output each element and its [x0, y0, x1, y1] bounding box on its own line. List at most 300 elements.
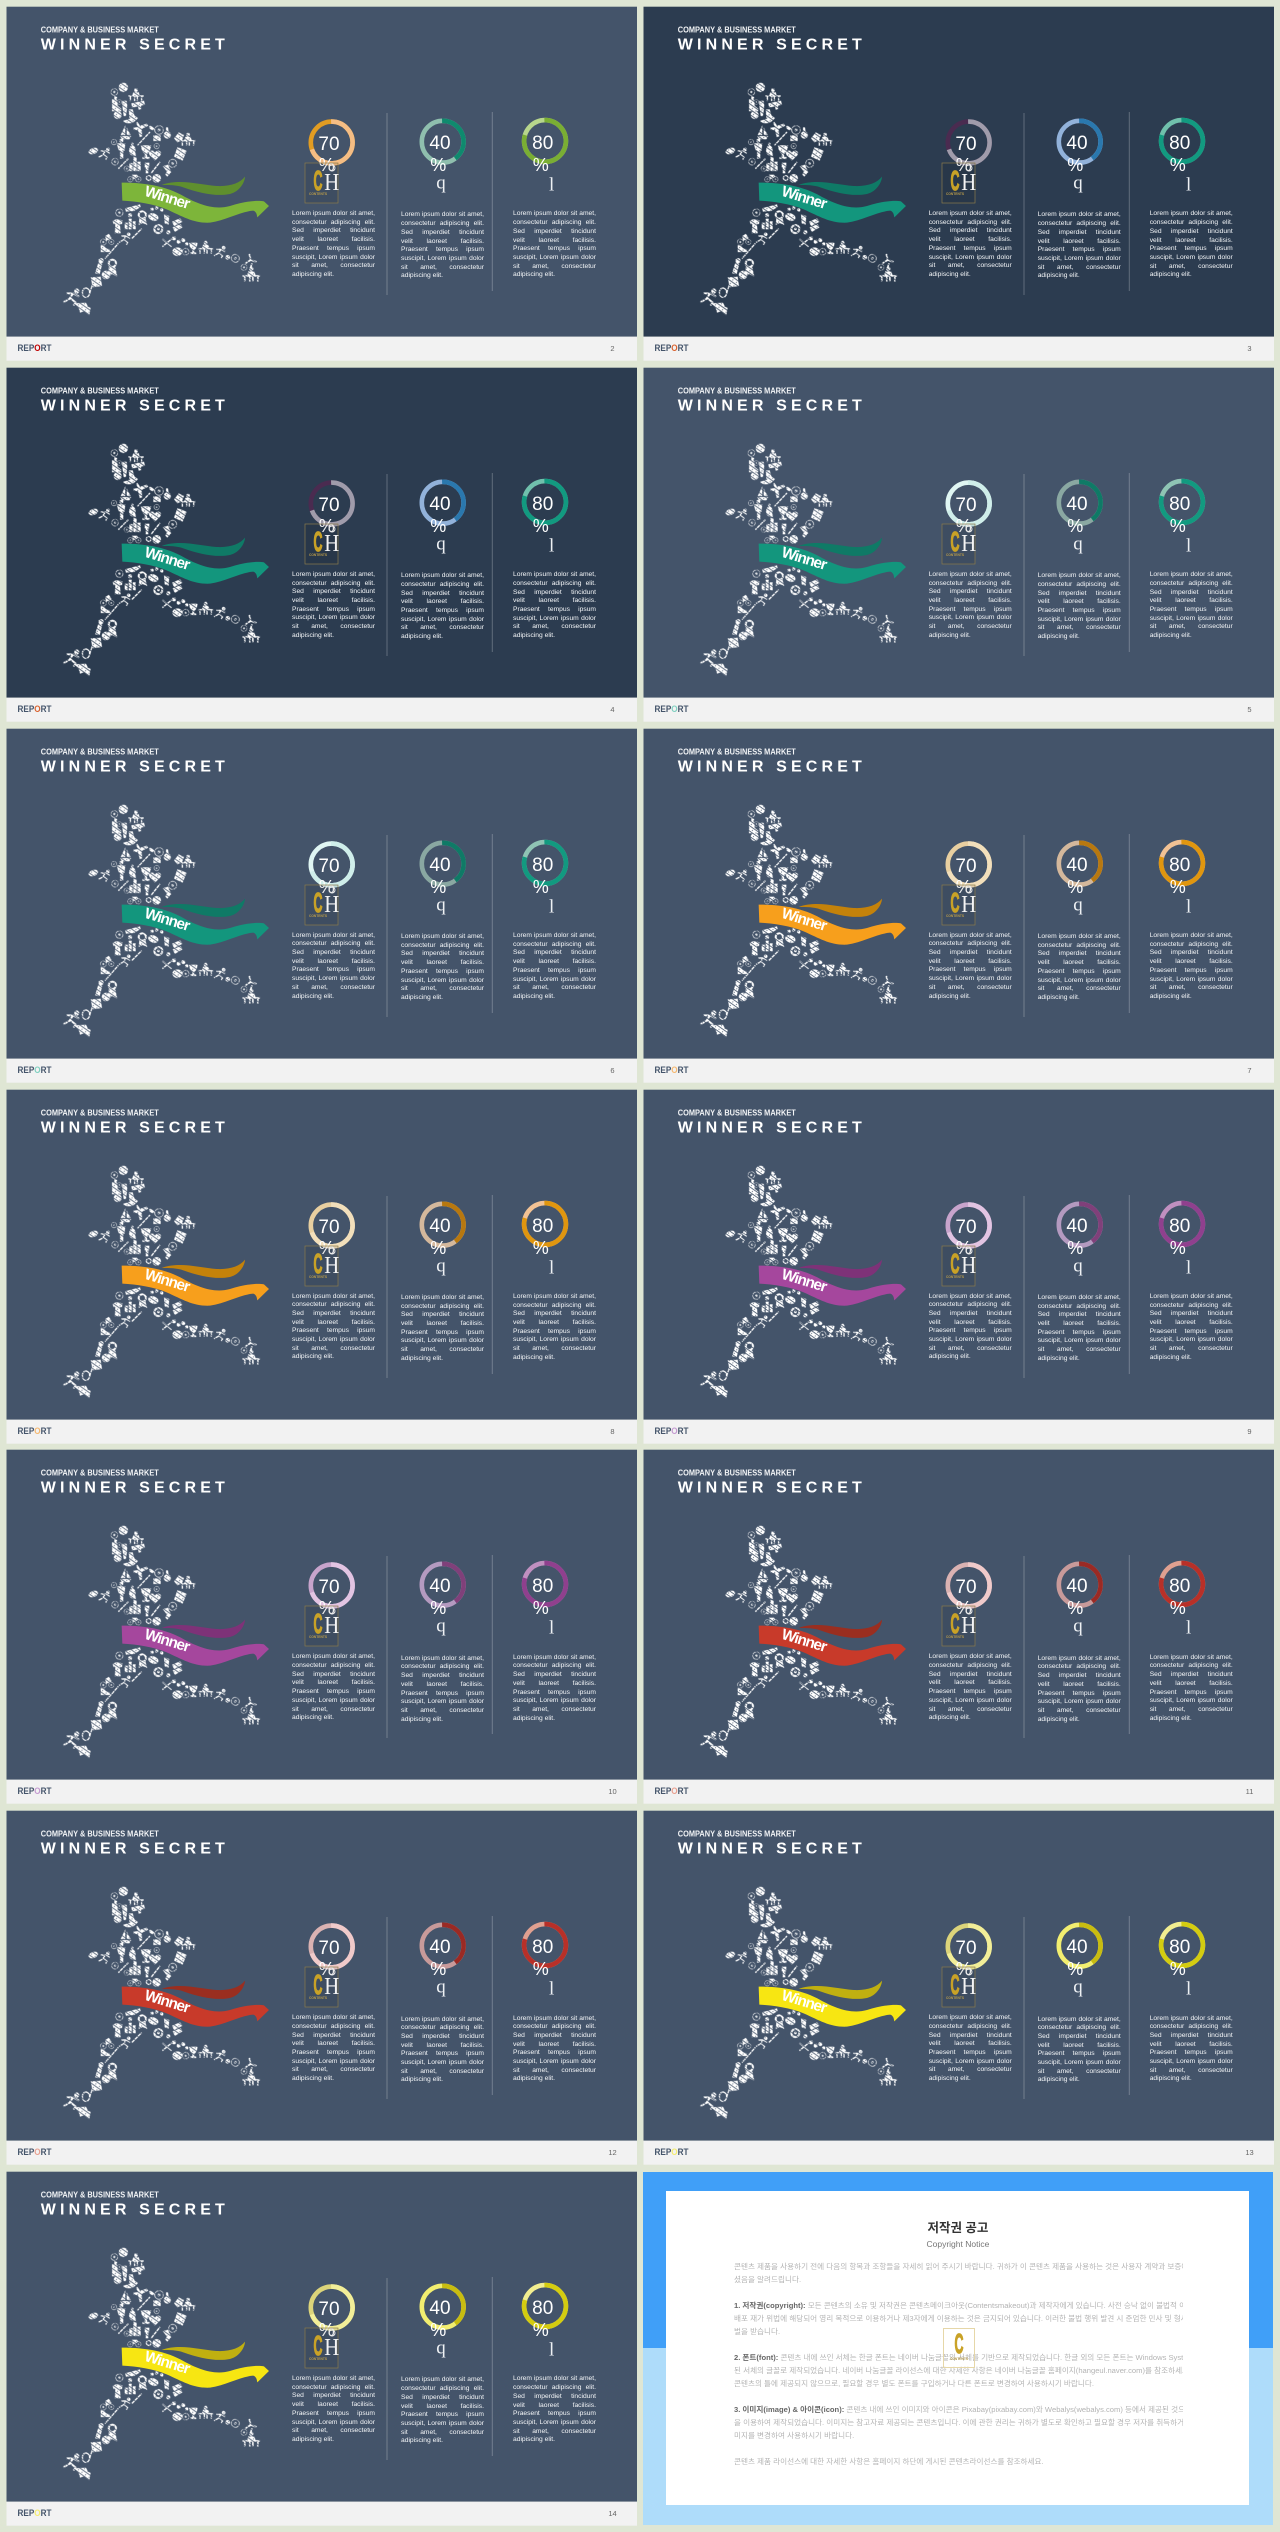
donut chart: 80: % — [1169, 877, 1185, 897]
text block 1: velit laoreet facilisis. — [929, 1319, 1012, 1326]
text block 3: Praesent tempus ipsum — [513, 1328, 596, 1335]
text block 1: sit amet, consectetur — [929, 1706, 1012, 1713]
donut chart: 40 — [422, 482, 464, 554]
text block 2: consectetur adipiscing elit. — [401, 2385, 484, 2392]
donut chart: 80: l — [1186, 536, 1191, 557]
icon: contents logo — [943, 2328, 975, 2368]
text block 3: adipiscing elit. — [513, 2075, 555, 2082]
text block 1: adipiscing elit. — [292, 1714, 334, 1721]
text block 3: Praesent tempus ipsum — [1150, 245, 1233, 252]
donut chart: 40: q — [436, 172, 446, 193]
text block 2 — [1038, 2016, 1121, 2085]
text block 1: suscipit, Lorem ipsum dolor — [929, 1697, 1012, 1704]
text block 1: Praesent tempus ipsum — [292, 966, 375, 973]
donut chart: 80: 80 — [532, 494, 553, 515]
donut chart: 80: l — [1186, 1979, 1191, 2000]
heading: WINNER SECRET — [677, 1119, 862, 1136]
text block 1: velit laoreet facilisis. — [292, 1679, 375, 1686]
text block 2: Lorem ipsum dolor sit amet, — [1038, 572, 1121, 579]
text block 2: consectetur adipiscing elit. — [1038, 942, 1121, 949]
text block 1: sit amet, consectetur — [929, 984, 1012, 991]
text block 3: Sed imperdiet tincidunt — [1150, 1671, 1233, 1678]
text block 3 — [513, 571, 596, 639]
text block 2: Lorem ipsum dolor sit amet, — [401, 1294, 484, 1301]
donut chart: 70: CONTENTS — [946, 192, 964, 196]
text block 3: consectetur adipiscing elit. — [1150, 219, 1233, 226]
text block 2: adipiscing elit. — [401, 272, 443, 279]
text block 1: consectetur adipiscing elit. — [929, 1662, 1012, 1669]
donut chart: 70: CONTENTS — [946, 1635, 964, 1639]
text block 2 — [401, 933, 484, 1001]
icon: runner figure with Winner ribbon: Winner — [779, 183, 829, 213]
text block 3: consectetur adipiscing elit. — [1150, 2023, 1233, 2030]
heading: WINNER SECRET — [677, 1480, 862, 1497]
text block 3: sit amet, consectetur — [1150, 1706, 1233, 1713]
footer: 3 — [1247, 344, 1251, 353]
donut chart: 80 — [1161, 1563, 1203, 1639]
donut chart: 40 — [422, 1203, 464, 1276]
text block 2: sit amet, consectetur — [1038, 264, 1121, 271]
text block 2: sit amet, consectetur — [401, 2068, 484, 2075]
text block 1: adipiscing elit. — [929, 632, 971, 639]
text block 3: adipiscing elit. — [1150, 1715, 1192, 1722]
heading — [41, 1468, 225, 1497]
slide background — [643, 728, 1274, 1058]
text block 2: Praesent tempus ipsum — [401, 968, 484, 975]
donut chart: 40: 40 — [429, 133, 451, 154]
donut chart: 80: 80 — [532, 2298, 553, 2319]
text block 3: Sed imperdiet tincidunt — [513, 2032, 596, 2039]
text block 3: adipiscing elit. — [513, 1354, 555, 1361]
text block 2: velit laoreet facilisis. — [401, 959, 484, 966]
text block 1: Sed imperdiet tincidunt — [929, 2032, 1012, 2039]
donut chart: 80: 80 — [532, 1216, 553, 1236]
text block 1: adipiscing elit. — [292, 271, 334, 278]
heading — [677, 24, 862, 54]
donut chart: 80 — [524, 2285, 566, 2361]
text block 1: Sed imperdiet tincidunt — [292, 588, 375, 595]
donut chart: 70: H — [324, 1974, 339, 2000]
footer — [643, 1058, 1274, 1082]
donut chart: 70: 70 — [318, 856, 340, 877]
icon: runner figure with Winner ribbon: Winner — [143, 1266, 192, 1295]
text block 2: suscipit, Lorem ipsum dolor — [1038, 2059, 1121, 2066]
text block 1: Sed imperdiet tincidunt — [929, 588, 1012, 595]
donut chart: 80: l — [1186, 1618, 1191, 1639]
text block 2: sit amet, consectetur — [401, 1707, 484, 1714]
donut chart: 70: H — [961, 1974, 976, 2000]
footer: 11 — [1245, 1787, 1253, 1796]
heading — [41, 2190, 225, 2218]
text block 2: Praesent tempus ipsum — [401, 607, 484, 614]
text block 1: velit laoreet facilisis. — [292, 2040, 375, 2047]
text block 2: velit laoreet facilisis. — [1038, 1320, 1121, 1327]
footer: REPORT — [654, 1426, 688, 1436]
text block 1: Praesent tempus ipsum — [292, 1688, 375, 1695]
text block 2: sit amet, consectetur — [401, 264, 484, 271]
donut chart: 40: 40 — [1066, 1216, 1087, 1236]
text block 2: adipiscing elit. — [1038, 633, 1080, 640]
text block 2: suscipit, Lorem ipsum dolor — [401, 2420, 484, 2427]
text block 1: consectetur adipiscing elit. — [292, 1662, 375, 1669]
text block 3: Sed imperdiet tincidunt — [513, 1310, 596, 1317]
text block 1: suscipit, Lorem ipsum dolor — [292, 2058, 375, 2065]
text block 1: consectetur adipiscing elit. — [292, 2023, 375, 2030]
slide background — [643, 1811, 1274, 2141]
donut chart: 40: 40 — [1066, 855, 1087, 876]
text block 2 — [1038, 1294, 1121, 1362]
text block 2 — [401, 2016, 484, 2085]
text block 1: Praesent tempus ipsum — [929, 1688, 1012, 1695]
footer: REPORT — [18, 704, 52, 715]
text block 1: Sed imperdiet tincidunt — [292, 949, 375, 956]
text block 1: suscipit, Lorem ipsum dolor — [292, 2419, 375, 2426]
text block 2: sit amet, consectetur — [401, 1346, 484, 1353]
donut chart: 80 — [1161, 842, 1203, 917]
text block 3: Sed imperdiet tincidunt — [513, 589, 596, 596]
donut chart: 80: 80 — [1169, 1216, 1190, 1236]
text block 1: adipiscing elit. — [929, 1714, 971, 1721]
text block: notice body — [734, 2260, 1183, 2500]
icon: contents logo: CONTENTS — [950, 2357, 969, 2361]
text block 1: suscipit, Lorem ipsum dolor — [929, 2058, 1012, 2065]
footer — [6, 1058, 637, 1082]
donut chart: 70 — [305, 843, 353, 925]
text block 1: sit amet, consectetur — [292, 1345, 375, 1352]
donut chart: 80 — [524, 842, 566, 917]
text block 2: Sed imperdiet tincidunt — [401, 2394, 484, 2401]
text block 2: Sed imperdiet tincidunt — [401, 229, 484, 236]
text block 1: Lorem ipsum dolor sit amet, — [292, 571, 375, 578]
text block 1: Sed imperdiet tincidunt — [292, 227, 375, 234]
heading: Korean title: 저작권 공고 — [927, 2221, 988, 2235]
donut chart: 70 — [305, 1926, 353, 2007]
slide background — [643, 1089, 1274, 1419]
heading — [41, 24, 225, 54]
text block 1 — [292, 1653, 375, 1721]
heading — [677, 1468, 862, 1497]
text block 2: sit amet, consectetur — [401, 2429, 484, 2436]
donut chart: 70: CONTENTS — [309, 1274, 328, 1278]
text block 2: adipiscing elit. — [401, 1355, 443, 1362]
donut chart: 40: % — [430, 155, 446, 175]
donut chart: 80: l — [549, 1257, 554, 1278]
text block 3: Praesent tempus ipsum — [1150, 967, 1233, 974]
text block 1: Lorem ipsum dolor sit amet, — [292, 1653, 375, 1660]
text block 2: Sed imperdiet tincidunt — [401, 590, 484, 597]
text block 1: sit amet, consectetur — [292, 623, 375, 630]
icon: runner figure with Winner ribbon — [700, 1887, 906, 2119]
panel: slide 11 — [644, 1450, 1274, 1804]
heading — [677, 1107, 862, 1136]
text block 1: Praesent tempus ipsum — [929, 1327, 1012, 1334]
text block 3: Sed imperdiet tincidunt — [513, 2393, 596, 2400]
footer: 6 — [610, 1066, 615, 1075]
donut chart: 40: q — [436, 894, 446, 915]
icon: runner figure with Winner ribbon — [63, 2248, 269, 2480]
donut chart: 80: % — [533, 516, 549, 536]
text block 2: Sed imperdiet tincidunt — [1038, 1672, 1121, 1679]
footer: 2 — [610, 344, 615, 353]
donut chart: 80: % — [533, 1959, 549, 1979]
text block 2: velit laoreet facilisis. — [401, 1681, 484, 1688]
donut chart: 80 — [524, 120, 566, 196]
text block 1: adipiscing elit. — [292, 632, 334, 639]
text block: notice body: 벌을 받습니다. — [734, 2327, 780, 2336]
donut chart: 80: % — [533, 2320, 549, 2340]
text block 2 — [401, 2376, 484, 2446]
text block 3: sit amet, consectetur — [1150, 1345, 1233, 1352]
donut chart: 70: C — [950, 1608, 959, 1639]
donut chart: 40: % — [1067, 877, 1083, 897]
donut chart: 40: 40 — [429, 1216, 451, 1236]
footer: 9 — [1247, 1426, 1251, 1436]
donut chart: 80: % — [1169, 155, 1185, 175]
donut chart: 70: 70 — [955, 1938, 976, 1959]
donut chart: 40 — [1058, 1925, 1100, 1997]
text block 3: Sed imperdiet tincidunt — [1150, 2032, 1233, 2039]
donut chart: 40: 40 — [1066, 1576, 1087, 1597]
text block 1: sit amet, consectetur — [292, 262, 375, 269]
text block 3: velit laoreet facilisis. — [513, 597, 596, 604]
panel: copyright notice — [643, 2172, 1273, 2525]
text block 3 — [513, 1293, 596, 1361]
donut chart: 80 — [1161, 120, 1203, 196]
text block 1: consectetur adipiscing elit. — [292, 1301, 375, 1308]
donut chart: 40: % — [430, 516, 446, 536]
donut chart: 70: % — [319, 155, 335, 175]
footer — [6, 2141, 637, 2165]
donut chart: 70: 70 — [955, 134, 976, 155]
text block 1: velit laoreet facilisis. — [929, 2040, 1012, 2047]
donut chart: 80 — [1161, 1203, 1203, 1278]
heading: WINNER SECRET — [677, 397, 862, 414]
text block 3: sit amet, consectetur — [513, 263, 596, 270]
donut chart: 70: C — [314, 165, 322, 196]
slide background — [6, 368, 637, 698]
text block 3: velit laoreet facilisis. — [1150, 597, 1233, 604]
text block 3: velit laoreet facilisis. — [1150, 1680, 1233, 1687]
donut chart: 40: q — [436, 2337, 446, 2358]
text block 2: Praesent tempus ipsum — [401, 2050, 484, 2057]
text block 2 — [401, 1294, 484, 1362]
heading: English subtitle: Copyright Notice — [926, 2239, 989, 2249]
icon: runner figure with Winner ribbon: Winner — [143, 905, 192, 935]
donut chart: 70: C — [314, 1248, 322, 1278]
slide background — [6, 2172, 637, 2502]
footer — [6, 698, 637, 722]
donut chart: 80 — [1161, 481, 1203, 557]
heading — [677, 1829, 862, 1858]
text block 2: Praesent tempus ipsum — [401, 246, 484, 253]
donut chart: 80: 80 — [1169, 1937, 1190, 1958]
text block 3: Lorem ipsum dolor sit amet, — [1150, 1654, 1233, 1661]
text block 2 — [401, 1655, 484, 1723]
text block 3: suscipit, Lorem ipsum dolor — [1150, 1697, 1233, 1704]
donut chart: 70: CONTENTS — [309, 1996, 328, 2000]
donut chart: 70: H — [961, 170, 976, 196]
footer: 4 — [610, 705, 615, 714]
donut chart: 40: 40 — [1066, 133, 1087, 154]
footer: REPORT — [654, 704, 688, 715]
donut chart: 40: 40 — [429, 855, 451, 876]
text block 1: Praesent tempus ipsum — [929, 966, 1012, 973]
text block 3: Lorem ipsum dolor sit amet, — [1150, 210, 1233, 217]
text block 1: consectetur adipiscing elit. — [292, 940, 375, 947]
donut chart: 80: 80 — [1169, 494, 1190, 515]
donut chart: 40 — [422, 1925, 464, 1997]
icon: runner figure with Winner ribbon: Winner — [779, 1987, 829, 2017]
text block 3: Lorem ipsum dolor sit amet, — [1150, 1293, 1233, 1300]
donut chart: 70 — [305, 482, 353, 564]
text block 3: Sed imperdiet tincidunt — [1150, 228, 1233, 235]
text block 1: velit laoreet facilisis. — [292, 1319, 375, 1326]
text block 2: Praesent tempus ipsum — [1038, 607, 1121, 614]
text block 1: consectetur adipiscing elit. — [929, 2023, 1012, 2030]
text block: notice body: 셨음을 알려드립니다. — [734, 2275, 801, 2284]
text block 1: velit laoreet facilisis. — [292, 958, 375, 965]
slide background — [6, 1450, 637, 1780]
text block 3: Sed imperdiet tincidunt — [513, 1671, 596, 1678]
text block 2: Praesent tempus ipsum — [401, 1690, 484, 1697]
donut chart: 70: H — [961, 1613, 976, 1639]
text block 1: velit laoreet facilisis. — [292, 597, 375, 604]
donut chart: 40: 40 — [429, 2298, 451, 2319]
donut chart: 80 — [524, 1924, 566, 2000]
text block 1: Praesent tempus ipsum — [292, 2049, 375, 2056]
panel: slide 8 — [6, 1090, 637, 1444]
text block 3: consectetur adipiscing elit. — [513, 2023, 596, 2030]
text block 3: Lorem ipsum dolor sit amet, — [1150, 2015, 1233, 2022]
text block 3: suscipit, Lorem ipsum dolor — [513, 254, 596, 261]
text block 3: consectetur adipiscing elit. — [513, 2384, 596, 2391]
donut chart: 70: H — [324, 1252, 339, 1278]
text block 3: Lorem ipsum dolor sit amet, — [513, 210, 596, 217]
text block 1: Sed imperdiet tincidunt — [929, 949, 1012, 956]
text block 3: sit amet, consectetur — [1150, 2067, 1233, 2074]
text block 3: suscipit, Lorem ipsum dolor — [513, 1336, 596, 1343]
heading: COMPANY & BUSINESS MARKET — [41, 1829, 160, 1839]
text block 2: adipiscing elit. — [401, 2437, 443, 2444]
text block 1: Sed imperdiet tincidunt — [292, 1671, 375, 1678]
donut chart: 80: l — [549, 1979, 554, 2000]
donut chart: 70: 70 — [955, 495, 976, 516]
donut chart: 70: C — [314, 1608, 322, 1639]
text block 2: adipiscing elit. — [1038, 1716, 1080, 1723]
text block 2: sit amet, consectetur — [1038, 2068, 1121, 2075]
text block 3: Lorem ipsum dolor sit amet, — [1150, 571, 1233, 578]
donut chart: 70: H — [324, 1613, 339, 1639]
text block 3 — [513, 2375, 596, 2445]
donut chart: 70: 70 — [318, 134, 340, 155]
donut chart: 40: % — [1067, 1238, 1083, 1258]
donut chart: 40 — [422, 2286, 464, 2358]
heading: COMPANY & BUSINESS MARKET — [41, 1107, 160, 1117]
text block 2: velit laoreet facilisis. — [401, 598, 484, 605]
text block 2: suscipit, Lorem ipsum dolor — [1038, 1698, 1121, 1705]
donut chart: 70 — [305, 1565, 353, 1646]
text block 3: suscipit, Lorem ipsum dolor — [1150, 976, 1233, 983]
donut chart: 70: % — [319, 1598, 335, 1618]
donut chart: 40: 40 — [1066, 494, 1087, 515]
text block 2: consectetur adipiscing elit. — [1038, 581, 1121, 588]
text block 3: sit amet, consectetur — [1150, 263, 1233, 270]
text block 3: Lorem ipsum dolor sit amet, — [513, 2015, 596, 2022]
heading: WINNER SECRET — [41, 1119, 225, 1136]
text block 3: adipiscing elit. — [513, 993, 555, 1000]
text block 1: adipiscing elit. — [929, 271, 971, 278]
text block 3: velit laoreet facilisis. — [1150, 958, 1233, 965]
text block 3: consectetur adipiscing elit. — [1150, 580, 1233, 587]
text block 3: sit amet, consectetur — [513, 984, 596, 991]
text block 1: consectetur adipiscing elit. — [929, 940, 1012, 947]
donut chart: 70: % — [319, 516, 335, 536]
text block 2: Sed imperdiet tincidunt — [401, 950, 484, 957]
donut chart: 40 — [1058, 121, 1100, 193]
text block 3: suscipit, Lorem ipsum dolor — [513, 2058, 596, 2065]
footer: 5 — [1247, 705, 1251, 714]
text block 3: Praesent tempus ipsum — [513, 967, 596, 974]
text block 1 — [292, 571, 375, 639]
text block 1: sit amet, consectetur — [292, 984, 375, 991]
footer — [643, 698, 1274, 722]
text block 1: adipiscing elit. — [929, 1353, 971, 1360]
text block 1: Praesent tempus ipsum — [929, 2049, 1012, 2056]
text block 2: consectetur adipiscing elit. — [401, 2024, 484, 2031]
text block 3 — [1150, 1654, 1233, 1722]
donut chart: 70: % — [319, 877, 335, 897]
donut chart: 40: q — [1073, 1616, 1083, 1637]
text block 1: suscipit, Lorem ipsum dolor — [292, 975, 375, 982]
donut chart: 70: CONTENTS — [946, 553, 964, 557]
text block 1: Lorem ipsum dolor sit amet, — [292, 2375, 375, 2382]
footer — [6, 337, 637, 361]
donut chart: 80: l — [549, 2340, 554, 2361]
text block 1: sit amet, consectetur — [292, 1706, 375, 1713]
icon: runner figure with Winner ribbon: Winner — [143, 183, 192, 213]
donut chart: 40: q — [436, 1616, 446, 1637]
text block 2: Lorem ipsum dolor sit amet, — [1038, 2016, 1121, 2023]
text block 1: suscipit, Lorem ipsum dolor — [929, 254, 1012, 261]
text block 3 — [513, 1654, 596, 1722]
donut chart: 40: % — [1067, 516, 1083, 536]
footer: 13 — [1245, 2148, 1253, 2157]
text block 3: adipiscing elit. — [1150, 632, 1192, 639]
text block 2: velit laoreet facilisis. — [401, 2402, 484, 2410]
donut chart: 80: % — [533, 155, 549, 175]
donut chart: 70: H — [324, 531, 339, 557]
donut chart: 70 — [942, 1926, 989, 2007]
donut chart: 70: H — [324, 2335, 339, 2361]
heading — [677, 746, 862, 775]
text block 2: sit amet, consectetur — [401, 624, 484, 631]
text block 3: velit laoreet facilisis. — [1150, 2041, 1233, 2048]
text block 1 — [928, 1653, 1012, 1721]
text block 1: consectetur adipiscing elit. — [929, 580, 1012, 587]
donut chart: 70: 70 — [318, 1938, 340, 1959]
text block 1: Lorem ipsum dolor sit amet, — [929, 571, 1012, 578]
text block 2: velit laoreet facilisis. — [1038, 1681, 1121, 1688]
text block 3: suscipit, Lorem ipsum dolor — [513, 2419, 596, 2426]
text block 3: consectetur adipiscing elit. — [1150, 941, 1233, 948]
text block 1: velit laoreet facilisis. — [292, 236, 375, 243]
donut chart: 40: % — [1067, 1598, 1083, 1618]
text block 1: suscipit, Lorem ipsum dolor — [929, 614, 1012, 621]
heading: WINNER SECRET — [677, 1841, 862, 1858]
heading — [41, 1829, 225, 1858]
footer: REPORT — [18, 1426, 52, 1436]
text block 3: Praesent tempus ipsum — [513, 1689, 596, 1696]
